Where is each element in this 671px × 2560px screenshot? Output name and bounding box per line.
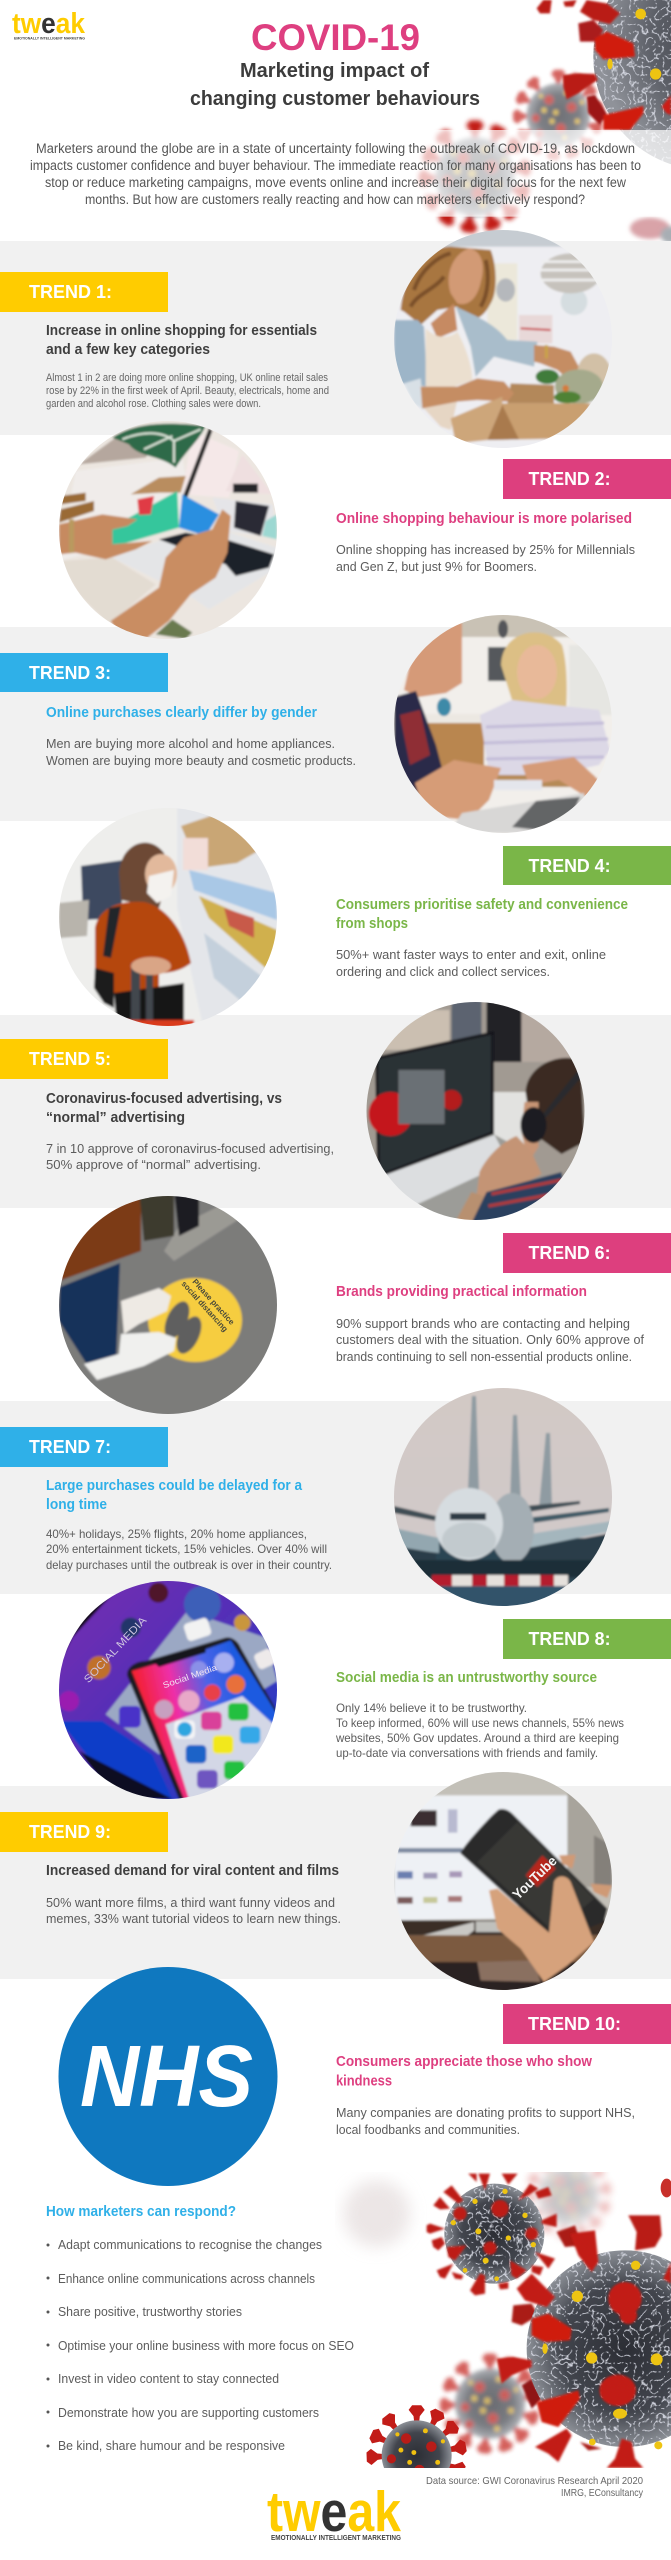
trend 6 body [336, 1316, 644, 1364]
trend 8 badge [503, 1619, 671, 1659]
trend 1 body: rose by 22% in the first week of April. Beauty, electricals, home and [46, 385, 329, 397]
trend 1 heading: Increase in online shopping for essentials [46, 323, 317, 339]
respond bullet list: Invest in video content to stay connected [58, 2371, 279, 2386]
upper medium virus [427, 2174, 557, 2295]
tweak logo bottom: tweak [267, 2480, 401, 2544]
trend 8 body [335, 1701, 624, 1760]
photo: phone with social media apps [56, 1578, 280, 1802]
trend 6 body: 90% support brands who are contacting and helping [336, 1316, 630, 1331]
trend 9 heading: Increased demand for viral content and films [46, 1863, 339, 1879]
NHS logo circle [58, 1967, 278, 2186]
panel: trend 9 band [0, 1786, 671, 1979]
intro paragraph: stop or reduce marketing campaigns, move events online and increase their digital focus for the next few [45, 175, 626, 190]
panel: trend 8 [335, 1619, 671, 1760]
faint blurred virus top [522, 2172, 614, 2241]
respond bullet list: Optimise your online business with more focus on SEO [58, 2338, 354, 2353]
trend 6 heading: Brands providing practical information [336, 1284, 587, 1300]
trend 1 badge: TREND 1: [29, 281, 112, 302]
trend 1 heading [46, 323, 317, 358]
photo: hand holding phone with YouTube [391, 1769, 615, 1993]
trend 7 body: delay purchases until the outbreak is over in their country. [46, 1558, 332, 1572]
panel: trend 6 [336, 1233, 671, 1364]
trend 7 heading: long time [46, 1497, 107, 1513]
photo: shoes on social distancing floor sticker: social distancing [180, 1279, 230, 1334]
respond bullet list: Share positive, trustworthy stories [58, 2304, 242, 2319]
trend 10 body: local foodbanks and communities. [336, 2122, 520, 2137]
trend 7 badge: TREND 7: [29, 1436, 111, 1457]
trend 8 body: To keep informed, 60% will use news channels, 55% news [336, 1716, 624, 1730]
trend 9 body: memes, 33% want tutorial videos to learn new things. [46, 1911, 341, 1926]
trend 6 badge [503, 1233, 671, 1273]
data source note: IMRG, EConsultancy [561, 2487, 644, 2499]
panel: trend 5 band [0, 1015, 671, 1208]
trend 3 badge [0, 653, 168, 692]
panel: trend 7 band [0, 1401, 671, 1594]
trend 4 body: 50%+ want faster ways to enter and exit, online [336, 947, 606, 962]
trend 4 heading [336, 897, 628, 932]
trend 6 body: customers deal with the situation. Only 60% approve of [336, 1332, 644, 1347]
photo: shoes on social distancing floor sticker: Please practice [191, 1277, 237, 1327]
respond bullet list [46, 2237, 354, 2453]
trend 4 badge [503, 846, 671, 885]
small lower-left virus [366, 2405, 467, 2468]
tweak logo bottom: EMOTIONALLY INTELLIGENT MARKETING [271, 2533, 401, 2542]
respond bullet list: Adapt communications to recognise the changes [58, 2237, 322, 2252]
trend 4 badge: TREND 4: [528, 855, 610, 876]
panel: trend 5 [0, 1039, 334, 1172]
trend 6 badge: TREND 6: [528, 1242, 610, 1263]
trend 2 body [336, 542, 635, 574]
title: COVID-19 [251, 17, 420, 58]
photo: shoes on social distancing floor sticker [54, 1191, 282, 1419]
trend 7 badge [0, 1427, 168, 1467]
trend 3 body: Women are buying more beauty and cosmetic products. [46, 753, 356, 768]
trend 1 heading: and a few key categories [46, 342, 210, 358]
subtitle: changing customer behaviours [190, 88, 480, 110]
trend 10 heading: Consumers appreciate those who show [336, 2054, 593, 2070]
subtitle: Marketing impact of [240, 60, 429, 82]
photo: masked shopper in supermarket [54, 803, 282, 1031]
trend 9 badge [0, 1812, 168, 1852]
trend 6 body: brands continuing to sell non-essential products online. [336, 1349, 632, 1364]
faint blurred virus left [343, 2180, 410, 2247]
trend 1 body: garden and alcohol rose. Clothing sales were down. [46, 398, 261, 410]
trend 5 heading [46, 1091, 282, 1126]
trend 2 body: and Gen Z, but just 9% for Boomers. [336, 559, 537, 574]
trend 3 body: Men are buying more alcohol and home appliances. [46, 736, 335, 751]
trend 4 body: ordering and click and collect services. [336, 964, 550, 979]
panel: how marketers can respond [46, 2204, 354, 2453]
trend 5 badge [0, 1039, 168, 1079]
trend 3 heading: Online purchases clearly differ by gender [46, 705, 317, 721]
trend 7 body [46, 1527, 332, 1572]
trend 10 badge [503, 2004, 671, 2044]
photo: hand holding phone with YouTube: YouTube [509, 1852, 560, 1902]
panel: trend 7 [0, 1427, 332, 1572]
trend 4 heading: from shops [336, 916, 408, 932]
trend 5 heading: “normal” advertising [46, 1110, 185, 1126]
header virus illustration [0, 0, 671, 243]
trend 8 heading: Social media is an untrustworthy source [336, 1670, 597, 1686]
data source note: Data source: GWI Coronavirus Research April 2020 [426, 2475, 643, 2487]
trend 3 body [46, 736, 356, 768]
trend 4 body [336, 947, 606, 979]
trend 1 badge [0, 272, 168, 312]
panel: trend 3 [0, 653, 356, 768]
trend 2 badge: TREND 2: [528, 468, 610, 489]
tweak logo top: tweak [12, 8, 86, 40]
blurred middle virus [440, 2354, 541, 2454]
trend 7 body: 20% entertainment tickets, 15% vehicles. Over 40% will [46, 1542, 327, 1556]
subtitle [190, 60, 480, 110]
trend 2 body: Online shopping has increased by 25% for Millennials [336, 542, 635, 557]
trend 5 body: 7 in 10 approve of coronavirus-focused advertising, [46, 1141, 334, 1156]
panel: trend 2 [336, 459, 671, 574]
respond heading: How marketers can respond? [46, 2204, 236, 2220]
trend 10 body: Many companies are donating profits to support NHS, [336, 2105, 635, 2120]
trend 5 heading: Coronavirus-focused advertising, vs [46, 1091, 282, 1107]
trend 5 body: 50% approve of “normal” advertising. [46, 1157, 261, 1172]
trend 7 body: 40%+ holidays, 25% flights, 20% home appliances, [46, 1527, 307, 1541]
photo: woman unpacking delivery box [391, 227, 615, 451]
trend 2 badge [503, 459, 671, 499]
trend 9 body: 50% want more films, a third want funny videos and [46, 1895, 335, 1910]
photo: phone with social media apps: SOCIAL MEDIA [82, 1614, 150, 1686]
trend 8 badge: TREND 8: [528, 1628, 610, 1649]
NHS logo circle: NHS [80, 2028, 253, 2125]
photo: couple at laptop [389, 610, 617, 838]
bottom virus illustration [340, 2172, 671, 2468]
trend 8 body: Only 14% believe it to be trustworthy. [336, 1701, 527, 1715]
panel: trend 10 [336, 2004, 671, 2137]
panel: trend 9 [0, 1812, 341, 1926]
trend 9 body [46, 1895, 341, 1926]
trend 1 body [46, 372, 329, 410]
trend 2 heading: Online shopping behaviour is more polarised [336, 511, 632, 527]
intro paragraph: Marketers around the globe are in a state of uncertainty following the outbreak of COVID-19, as lockdown [36, 141, 635, 156]
photo: hands with wallet and card at laptop [56, 418, 280, 642]
data source note [426, 2475, 644, 2499]
panel: trend 4 [336, 846, 671, 979]
trend 8 body: websites, 50% Gov updates. Around a third are keeping [335, 1731, 619, 1745]
tweak logo top: EMOTIONALLY INTELLIGENT MARKETING [14, 36, 85, 40]
trend 9 badge: TREND 9: [29, 1821, 111, 1842]
trend 10 badge: TREND 10: [528, 2013, 621, 2034]
trend 3 badge: TREND 3: [29, 662, 111, 683]
large foreground virus [497, 2215, 671, 2468]
intro paragraph [30, 141, 641, 207]
panel: trend 3 band [0, 627, 671, 821]
trend 5 badge: TREND 5: [29, 1048, 111, 1069]
trend 5 body [46, 1141, 334, 1172]
respond bullet list: Enhance online communications across channels [58, 2271, 315, 2286]
trend 4 heading: Consumers prioritise safety and convenience [336, 897, 628, 913]
photo: parked aeroplanes [389, 1383, 617, 1611]
trend 1 body: Almost 1 in 2 are doing more online shopping, UK online retail sales [46, 372, 328, 384]
panel: trend 1 [0, 241, 671, 435]
intro paragraph: months. But how are customers really reacting and how can marketers effectively respond? [85, 192, 585, 207]
trend 8 body: up-to-date via conversations with friends and family. [336, 1746, 598, 1760]
respond bullet list: Demonstrate how you are supporting customers [58, 2405, 319, 2420]
trend 10 body [336, 2105, 635, 2137]
trend 10 heading: kindness [336, 2074, 392, 2090]
trend 7 heading [46, 1478, 303, 1513]
trend 7 heading: Large purchases could be delayed for a [46, 1478, 303, 1494]
photo: phone with social media apps: Social Media [161, 1662, 218, 1690]
respond bullet list: Be kind, share humour and be responsive [58, 2438, 285, 2453]
trend 10 heading [336, 2054, 593, 2090]
photo: editor with headphones watching virus on monitor [362, 997, 590, 1225]
